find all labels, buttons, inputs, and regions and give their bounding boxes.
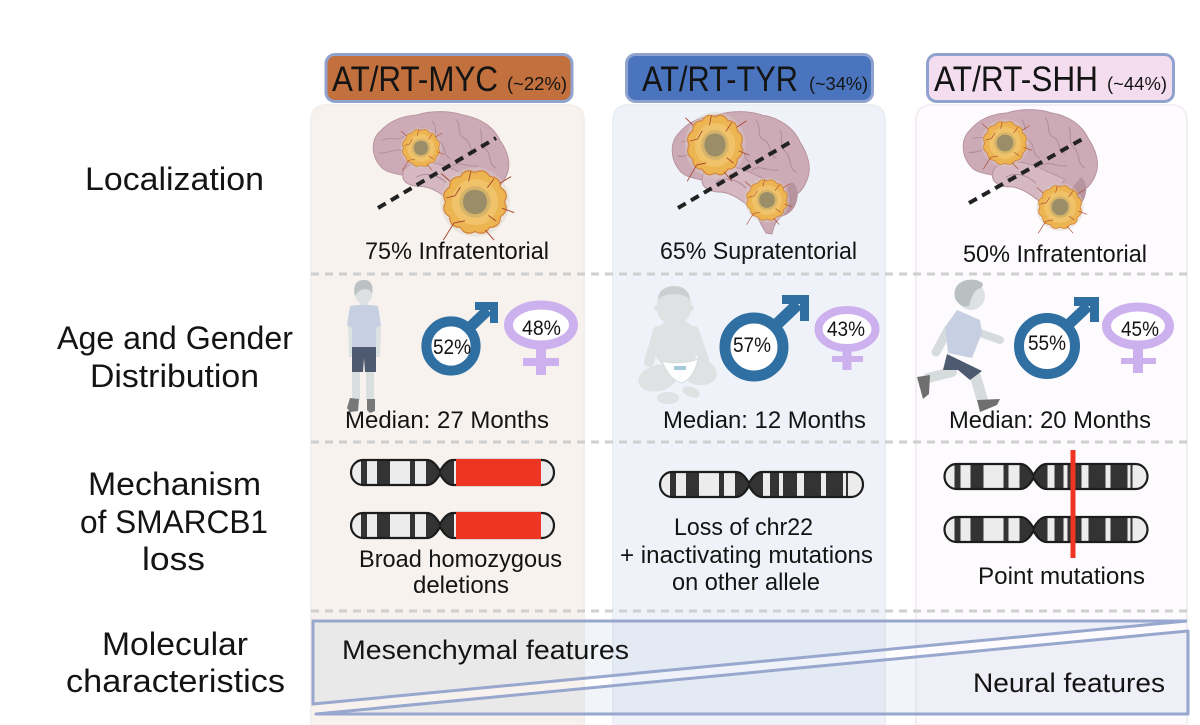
text: Loss of chr22 and inactivating mutations: on other allele [672, 569, 820, 596]
text: 50% Infratentorial: 50% Infratentorial [963, 241, 1147, 268]
wedge: mesenchymal features: Mesenchymal features [342, 635, 629, 665]
text: Broad homozygous deletions: Broad homozygous [359, 546, 562, 573]
icon: sitting baby [635, 286, 719, 404]
row label: Molecular characteristics [66, 626, 285, 699]
header: AT/RT-TYR: (~34%) [809, 74, 868, 94]
icon: male symbol 52% [426, 302, 498, 371]
row label: Molecular characteristics: characteristics [66, 663, 285, 699]
wedge: neural features: Neural features [973, 668, 1165, 698]
header: AT/RT-MYC: AT/RT-MYC [332, 60, 498, 99]
icon: male symbol 52%: 52% [433, 336, 471, 359]
header: AT/RT-SHH: (~44%) [1107, 74, 1167, 94]
header: AT/RT-SHH: AT/RT-SHH [934, 60, 1098, 99]
panel: AT/RT-TYR column [613, 105, 885, 725]
icon: running child [917, 280, 1000, 412]
wedge: mesenchymal features [313, 621, 1187, 704]
text: Median 20 Months: Median: 20 Months [949, 407, 1151, 434]
header: AT/RT-SHH [928, 54, 1174, 102]
icon: female symbol 48%: 48% [522, 317, 561, 340]
text: Loss of chr22 and inactivating mutations: Loss of chr22 [674, 514, 813, 541]
icon: brain with tumors, MYC [373, 112, 514, 240]
panel: AT/RT-SHH column [916, 105, 1187, 725]
row label: Localization: Localization [85, 161, 264, 197]
icon: male symbol 57%: 57% [733, 334, 771, 357]
icon: chromosomes with point mutation [944, 450, 1148, 558]
icon: male symbol 57% [725, 295, 809, 376]
row label: Molecular characteristics: Molecular [102, 626, 248, 662]
text: Broad homozygous deletions [359, 546, 562, 599]
text: Median 12 Months: Median: 12 Months [663, 407, 866, 434]
icon: male symbol 55%: 55% [1028, 332, 1066, 355]
header: AT/RT-MYC [326, 54, 572, 102]
row label: Mechanism of SMARCB1 loss: loss [142, 541, 205, 577]
header: AT/RT-TYR: AT/RT-TYR [642, 60, 798, 99]
header: AT/RT-TYR [626, 54, 872, 102]
row label: Age and Gender Distribution: Distribution [90, 358, 259, 394]
icon: single chromosome [660, 472, 863, 497]
text: Median 27 Months: Median: 27 Months [345, 407, 549, 434]
header: AT/RT-MYC: (~22%) [507, 74, 567, 94]
panel: AT/RT-MYC column [311, 105, 584, 725]
row label: Mechanism of SMARCB1 loss: Mechanism [88, 466, 261, 502]
icon: standing child [347, 280, 381, 413]
icon: female symbol 48% [508, 305, 574, 375]
icon: female symbol 43%: 43% [827, 318, 865, 341]
icon: brain with tumors, SHH [963, 110, 1097, 233]
text: Loss of chr22 and inactivating mutations: + inactivating mutations [620, 542, 873, 569]
icon: female symbol 43% [818, 310, 876, 370]
row dividers [311, 274, 1187, 611]
icon: female symbol 45% [1106, 307, 1170, 373]
icon: brain with tumors, TYR [672, 112, 809, 234]
text: 75% Infratentorial: 75% Infratentorial [365, 238, 549, 265]
text: Point mutations: Point mutations [978, 563, 1145, 590]
row label: Age and Gender Distribution: Age and Gender [57, 320, 293, 356]
icon: chromosomes with broad deletions [351, 459, 554, 539]
row label: Mechanism of SMARCB1 loss [80, 466, 268, 577]
text: Broad homozygous deletions: deletions [413, 572, 509, 599]
text: 65% Supratentorial: 65% Supratentorial [660, 238, 857, 265]
icon: male symbol 55% [1019, 297, 1099, 374]
wedge: neural features [316, 631, 1188, 714]
row label: Mechanism of SMARCB1 loss: of SMARCB1 [80, 504, 268, 540]
row label: Age and Gender Distribution [57, 320, 293, 394]
text: Loss of chr22 and inactivating mutations [620, 514, 873, 596]
icon: female symbol 45%: 45% [1121, 318, 1159, 341]
